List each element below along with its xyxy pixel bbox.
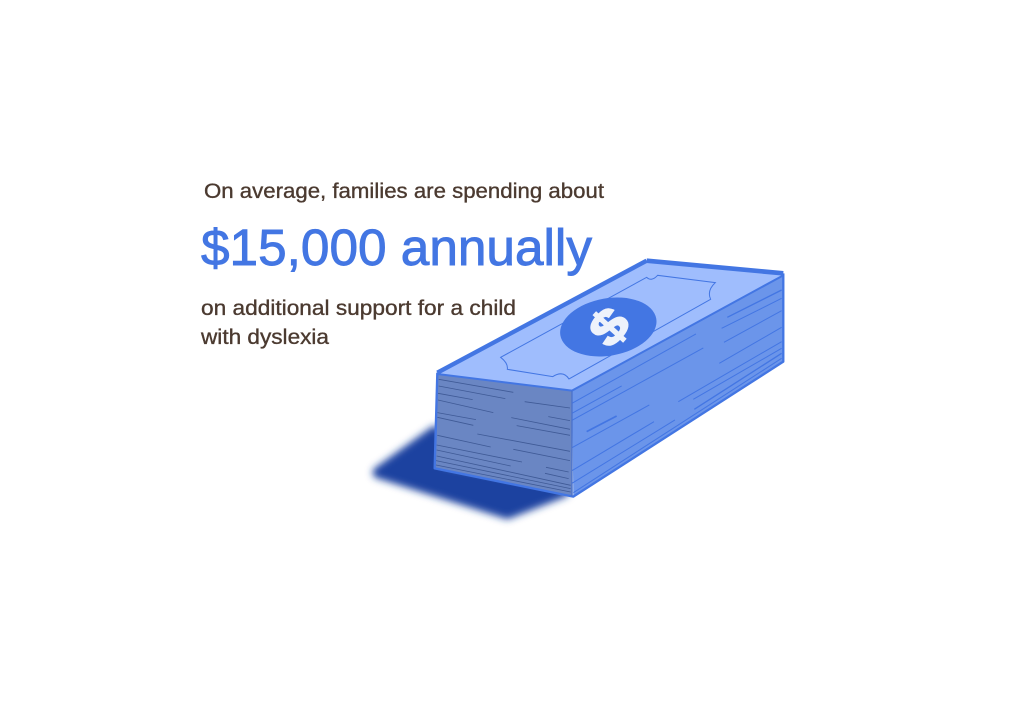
shadow [378,432,563,513]
right face of stack [572,275,783,497]
supporting text: on additional support for a child [201,297,516,320]
dollar sign: $ [577,296,641,357]
center oval [555,290,661,364]
intro text: On average, families are spending about [204,180,604,203]
supporting text [200,297,516,349]
outline of stack [435,261,783,497]
bill inner border [501,275,715,379]
front face of stack [435,373,573,496]
top face of bill [437,261,783,391]
headline statistic: $15,000 annually [201,219,592,276]
illustration: stack of money [378,261,783,513]
supporting text: with dyslexia [200,326,329,349]
